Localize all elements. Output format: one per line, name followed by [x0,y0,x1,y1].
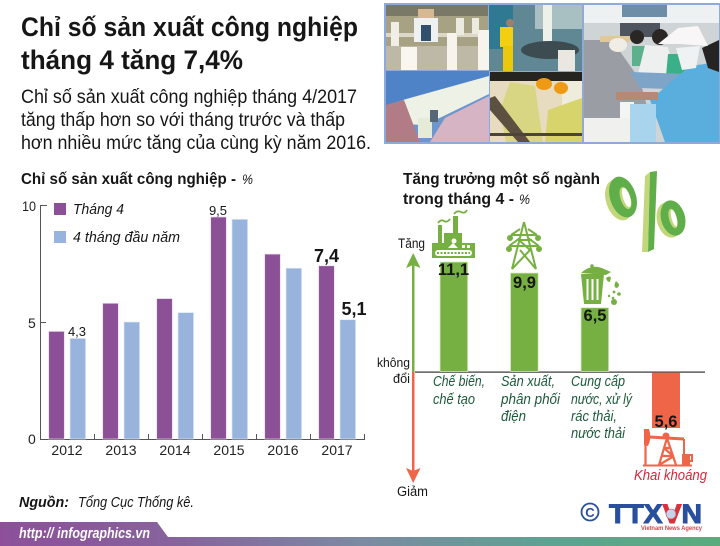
title: tháng 4 tăng 7,4% [21,45,243,75]
chart title: industrial production index: % [242,171,253,187]
growth axis: không [377,356,410,370]
chart title: sector growth: trong tháng 4 - [403,191,514,208]
label: power [500,374,561,425]
arrow: increase [406,253,420,372]
bar chart: industrial production index [22,198,367,458]
year labels: 2017 [321,442,353,458]
year labels: 2015 [213,442,245,458]
y axis labels: 5 [28,315,36,331]
label: water and waste [571,374,633,442]
label: water and waste: Cung cấp [571,374,625,390]
icon: 3D percent sign [600,171,689,252]
arrow: decrease [406,372,420,483]
y axis labels [22,198,36,447]
icon: trash bin [581,264,621,305]
icon: power pylon [507,222,541,269]
label: power: điện [501,409,526,425]
sector labels [433,374,707,484]
title [21,12,358,75]
year labels: 2012 [51,442,83,458]
bar: water and waste [581,307,609,372]
bar: manufacturing [438,261,469,372]
label: manufacturing [433,374,485,408]
title: Chỉ số sản xuất công nghiệp [21,12,358,42]
y axis labels: 0 [28,431,36,447]
footer band [0,522,720,546]
chart title: sector growth [403,171,600,208]
axes [40,206,365,440]
intro text: tăng thấp hơn so với tháng trước và thấp [21,110,345,131]
photo collage [384,3,720,144]
label: water and waste: nước thải [571,426,626,442]
bars: first four months [70,219,356,439]
growth axis: Tăng [398,236,425,251]
value labels: 4,3 [68,324,86,339]
icon: oil pumpjack [643,429,692,466]
legend: 4 tháng đầu năm [73,230,180,246]
value labels: 9,5 [209,203,227,218]
bar: mining [652,373,680,431]
y axis labels: 10 [22,198,36,214]
label: manufacturing: chế tạo [433,392,475,408]
label: manufacturing: Chế biến, [433,374,485,390]
photo: worker in yellow [489,5,582,71]
legend [54,202,180,246]
photo: sacks warehouse [386,71,489,142]
label: water and waste: nước, xử lý [571,392,633,408]
photo: spinning machines [386,5,489,70]
label: power: phân phối [500,392,561,408]
chart title: sector growth: Tăng trưởng một số ngành [403,171,600,188]
year labels: 2013 [105,442,137,458]
footer band: http:// infographics.vn [19,526,150,542]
bar: manufacturing: 11,1 [438,261,469,279]
bar: mining: 5,6 [655,413,677,431]
photo: construction workers [490,72,582,142]
year labels: 2014 [159,442,191,458]
logo: TTXVN [582,499,703,532]
source [19,494,194,511]
bar: water and waste: 6,5 [584,307,606,325]
chart title: industrial production index: Chỉ số sản xuất công nghiệp - [21,171,236,188]
chart title: sector growth: % [519,191,530,207]
bars: April [49,217,334,439]
intro text: Chỉ số sản xuất công nghiệp tháng 4/2017 [21,87,357,108]
logo: TTXVN: C [585,505,595,520]
intro text: hơn nhiều mức tăng của cùng kỳ năm 2016. [21,133,371,154]
icon: factory [432,210,475,258]
growth axis: Giảm [397,484,428,499]
label: water and waste: rác thải, [571,409,617,425]
value labels: 5,1 [341,299,367,319]
bar: power [510,273,538,372]
photo: electronics assembly [584,5,719,142]
logo: TTXVN: TTXVN [609,499,702,529]
source: Tổng Cục Thống kê. [78,494,194,511]
intro text [21,87,371,154]
value labels [68,203,367,339]
bar: power: 9,9 [513,274,536,292]
legend: Tháng 4 [73,202,124,218]
year labels [51,442,353,458]
source: Nguồn: [19,494,69,511]
growth axis [377,236,705,499]
label: mining: Khai khoáng [634,468,707,484]
year labels: 2016 [267,442,299,458]
label: power: Sản xuất, [501,374,555,390]
value labels: 7,4 [314,246,339,266]
logo: TTXVN: Vietnam News Agency [641,526,703,532]
growth axis: đổi [393,372,410,386]
